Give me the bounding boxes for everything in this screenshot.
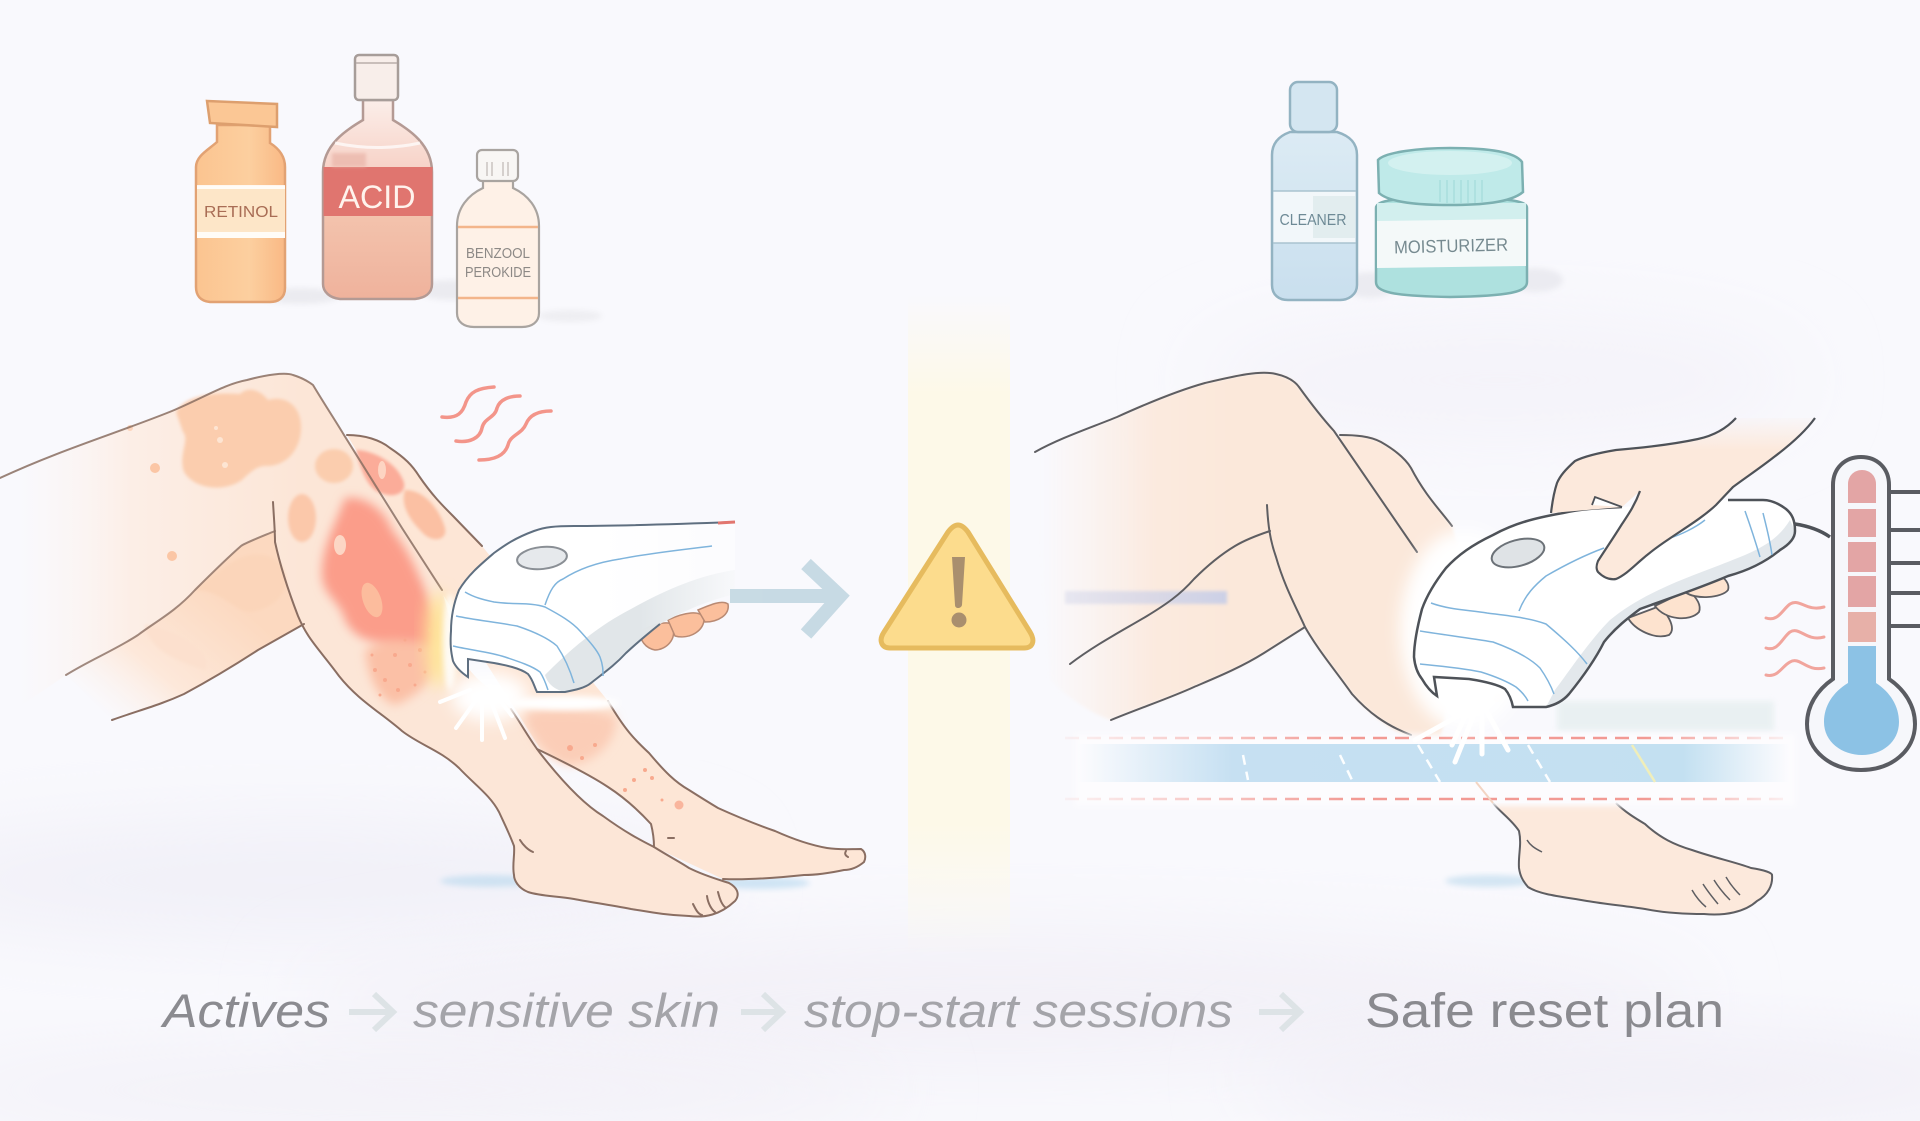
bottle: acid bbox=[323, 55, 482, 300]
device glow: left bbox=[426, 592, 620, 721]
arrow: progression bbox=[730, 564, 840, 634]
label: cleaner: CLEANER bbox=[1280, 212, 1346, 229]
step: safe reset plan: Safe reset plan bbox=[1365, 985, 1724, 1038]
jar: moisturizer bbox=[1376, 148, 1563, 297]
step: actives: Actives bbox=[160, 984, 330, 1037]
near leg bbox=[0, 374, 738, 917]
device cord bbox=[1795, 524, 1830, 537]
step: stop-start sessions: stop-start sessions bbox=[804, 984, 1233, 1037]
ground shadows bbox=[440, 875, 810, 889]
back leg bbox=[347, 435, 865, 879]
caption: process chain bbox=[160, 984, 1724, 1038]
thermometer bbox=[1807, 457, 1920, 770]
label: retinol: RETINOL bbox=[204, 204, 278, 221]
power button bbox=[516, 544, 568, 572]
inflamed area bbox=[322, 498, 616, 765]
rash speckles bbox=[127, 425, 684, 810]
leg skin bbox=[1035, 373, 1500, 740]
sparks: left bbox=[440, 690, 512, 740]
device glow: right bbox=[1400, 530, 1530, 730]
illustration: recovered legs bbox=[1035, 373, 1535, 887]
heat waves: left bbox=[442, 387, 551, 460]
rash patches bbox=[145, 390, 445, 670]
arrow 2 bbox=[741, 994, 782, 1030]
hand: right bbox=[1551, 418, 1815, 579]
label: acid: ACID bbox=[338, 179, 416, 215]
power button bbox=[1489, 533, 1547, 573]
scale ticks bbox=[1891, 492, 1920, 626]
sparks: right bbox=[1415, 712, 1508, 762]
illustration: irritated legs bbox=[0, 374, 865, 917]
heat waves: right bbox=[1766, 602, 1824, 675]
leg outlines bbox=[1035, 373, 1452, 735]
arrow 1 bbox=[349, 994, 393, 1030]
yellow caution band bbox=[908, 295, 1010, 955]
label: moisturizer: MOISTURIZER bbox=[1394, 235, 1508, 257]
muted bar: right bbox=[1065, 591, 1227, 604]
bottle: cleaner bbox=[1272, 82, 1396, 300]
fingers: right bbox=[1628, 574, 1728, 636]
skin barrier diagram bbox=[1065, 701, 1795, 806]
warning triangle bbox=[881, 525, 1033, 648]
ground shadow bbox=[1445, 875, 1535, 887]
leg outlines bbox=[0, 374, 865, 917]
bottle: benzoyl peroxide bbox=[457, 150, 602, 327]
label: benzoyl peroxide: PEROKIDE bbox=[465, 265, 531, 281]
arrow 3 bbox=[1259, 994, 1300, 1030]
far thigh bbox=[66, 531, 304, 720]
label: benzoyl peroxide: BENZOOL bbox=[466, 246, 530, 262]
fingers: left bbox=[640, 602, 728, 650]
step: sensitive skin: sensitive skin bbox=[413, 984, 720, 1037]
bottle: retinol bbox=[196, 101, 340, 304]
device: left handset bbox=[451, 522, 735, 692]
foot: right bbox=[1493, 803, 1772, 914]
device: right handset bbox=[1414, 500, 1795, 707]
rash highlights bbox=[214, 426, 387, 620]
